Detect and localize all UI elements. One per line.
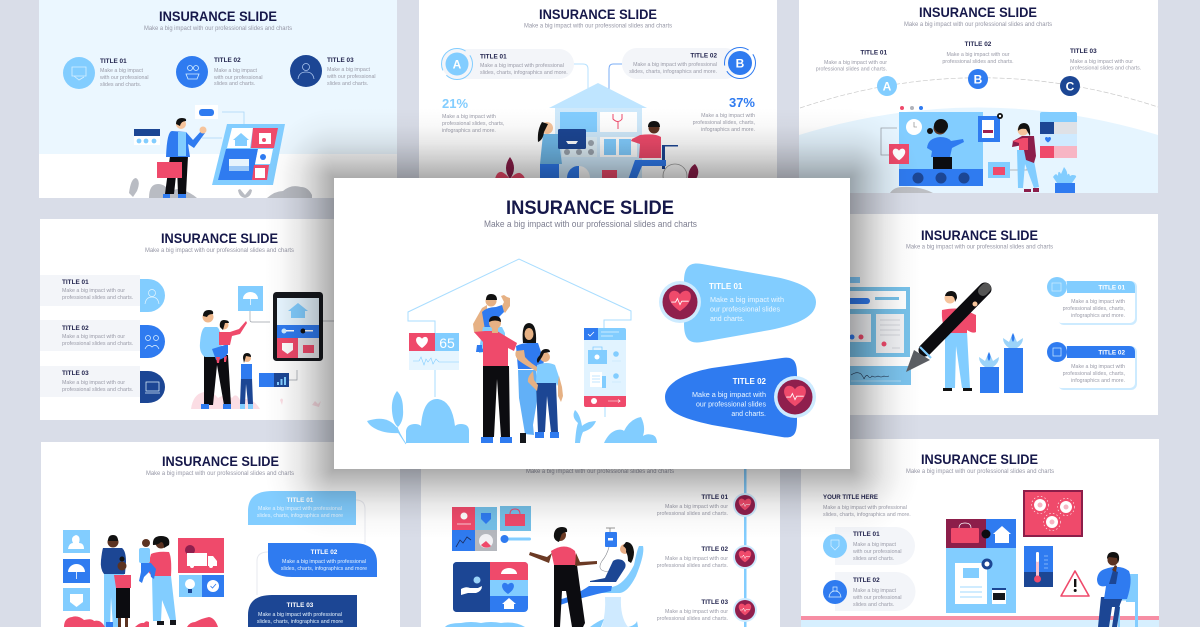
stat 21% [442,96,504,134]
slide 2 subtitle: Make a big impact with our professional slides and charts [524,22,672,30]
pill B: TITLE 02 [690,52,717,60]
card 01 [1047,277,1137,325]
stat 37%: infographics and more. [701,127,755,133]
point C: professional slides and charts. [1070,66,1141,72]
stat 37%: 37% [729,95,755,110]
IV drip [600,528,617,572]
pill 01: slides and charts. [853,556,894,562]
flow connector lines [257,500,365,595]
house outline [408,259,631,417]
centre subtitle: Make a big impact with our professional slides and charts [484,219,697,229]
stat 21%: professional slides, charts, [442,121,504,127]
dental chair with patient [554,542,643,627]
pill 01: with our professional [853,549,902,555]
pill B [622,48,756,79]
card 01: TITLE 01 [287,497,314,504]
card 02: professional slides, charts, [1063,371,1125,377]
grey foliage [890,187,933,193]
pill B: slides, charts, infographics and more. [629,69,717,75]
umbrella tile [238,286,270,322]
tablet dashboard [212,124,285,185]
giant pen [906,288,986,372]
card 02: TITLE 02 [1098,350,1125,356]
bag tile [988,162,1027,178]
potted plant [1053,167,1076,193]
item 01: with our professional [100,75,149,81]
doctor [529,527,597,627]
blue foliage [445,619,638,627]
item 03: TITLE 03 [327,57,354,64]
burgundy plants [495,157,698,179]
callout 02: TITLE 02 [733,377,767,386]
left plants [367,391,657,444]
virus tile [1023,490,1083,537]
intro text: YOUR TITLE HERE [823,494,879,501]
callout 02: Make a big impact with [692,392,766,399]
money tile [195,105,218,119]
slide 5: pen signature with two cards [840,214,1158,415]
slide 4: three side tabs with family [40,219,340,420]
nurse with tablet [538,122,586,180]
point C: C [1066,80,1075,94]
item 03: slides and charts. [327,81,368,87]
point C [1060,48,1141,96]
mother [515,323,544,443]
card 01: slides, charts, infographics and more [257,513,343,519]
slide 2 heading: INSURANCE SLIDE [539,6,657,22]
bar with leaf 2 [1003,333,1023,393]
card 02: Make a big impact with [1071,364,1125,370]
soft shadow of centre slide [264,108,920,539]
timeline item 03: TITLE 03 [701,599,728,606]
timeline item 02: TITLE 02 [701,546,728,553]
point A: professional slides and charts. [816,66,887,72]
item 01: Make a big impact [100,68,144,74]
point C: Make a big impact with our [1070,59,1133,65]
callout 01: Make a big impact with [710,297,784,304]
card 01: TITLE 01 [1098,284,1125,292]
light blue floor [801,620,1159,627]
slide 1 subtitle: Make a big impact with our professional slides and charts [144,25,292,32]
card 01: Make a big impact with [1071,299,1125,305]
slide 1: three title icons with businessman [39,0,397,198]
item 02 [176,56,263,88]
slide 8 subtitle: Make a big impact with our professional slides and charts [906,468,1054,475]
pink floor band [801,616,1159,620]
item 01 [63,57,149,89]
timeline item 01 [657,493,757,517]
tab 03 [40,366,165,403]
timeline item 02: Make a big impact with our [665,556,728,562]
pill 02: TITLE 02 [853,577,880,584]
contract document [840,277,910,357]
insurance tile board [946,519,1016,613]
woman presenter [1012,123,1039,192]
tab 02: TITLE 02 [62,325,89,332]
timeline item 03 [657,598,757,622]
pill A [442,48,574,80]
callout 01: TITLE 01 [709,282,743,291]
pill A: Make a big impact with professional [480,63,564,69]
point B: B [974,72,983,86]
son [528,349,563,438]
app panel [1040,112,1077,158]
point A: Make a big impact with our [824,60,887,66]
item 02: TITLE 02 [214,57,241,64]
stat 21%: infographics and more. [442,128,496,134]
card 02: infographics and more. [1071,378,1125,384]
father carrying daughter [200,310,247,409]
pill A: A [453,58,462,72]
bar with leaf 1 [979,352,999,393]
pill 01 [823,527,915,565]
pill 01: Make a big impact [853,542,897,548]
stat 21%: 21% [442,96,468,111]
child on shoulders [473,294,510,353]
heart tile and bracket [881,128,909,164]
slide 4 heading: INSURANCE SLIDE [161,230,278,246]
small chart tile [259,370,297,387]
tab 03: TITLE 03 [62,370,89,377]
tab 02 [40,320,165,358]
pill 01: TITLE 01 [853,531,880,538]
timeline item 02: professional slides and charts. [657,563,728,569]
thermometer tile [1024,546,1053,587]
tab 01: professional slides and charts. [62,295,133,301]
tab 02: professional slides and charts. [62,341,133,347]
video call window [899,112,983,186]
slide 3 heading: INSURANCE SLIDE [919,4,1037,20]
point B [942,41,1014,89]
man in wheelchair [628,121,687,188]
item 01: slides and charts. [100,82,141,88]
card 03 [248,595,357,627]
father with child on shoulders [473,294,517,443]
slide 3 subtitle: Make a big impact with our professional slides and charts [904,21,1052,28]
bulb and check tiles [179,575,224,597]
card 03: TITLE 03 [287,602,314,609]
care panel [453,562,528,612]
slide 4 subtitle: Make a big impact with our professional slides and charts [145,247,294,254]
pill B: B [736,56,745,70]
pill 02: Make a big impact [853,588,897,594]
card 02: Make a big impact with professional [282,559,366,565]
intro text: Make a big impact with professional [823,505,907,511]
point A [816,50,897,96]
businessman with case [157,118,206,198]
stat 37% [693,95,755,133]
light blue hill [799,108,1158,193]
timeline item 01: Make a big impact with our [665,504,728,510]
small girl [240,353,253,409]
connector lines [574,64,588,89]
tab 03: professional slides and charts. [62,387,133,393]
icon tiles left [63,530,90,611]
card 02: slides, charts, infographics and more [281,566,367,572]
tab 01 [40,275,165,312]
item 02: with our professional [214,75,263,81]
item 03: with our professional [327,74,376,80]
item 02: Make a big impact [214,68,258,74]
pill A: slides, charts, infographics and more. [480,70,568,76]
phone app [584,328,626,407]
signature strip [840,366,911,385]
pill 02: with our professional [853,595,902,601]
timeline item 02 [657,545,757,569]
slide 5 heading: INSURANCE SLIDE [921,227,1038,243]
vertical timeline [744,462,746,627]
card 01: professional slides, charts, [1063,306,1125,312]
callout 01: our professional slides [710,306,780,314]
point A: TITLE 01 [860,50,887,56]
warning triangle [1061,571,1089,596]
tab 01: Make a big impact with our [62,288,125,294]
slide 8 heading: INSURANCE SLIDE [921,451,1038,467]
item 01: TITLE 01 [100,58,127,65]
callout 01: and charts. [710,316,745,323]
point A: A [883,80,892,94]
person holding giant pen [906,288,986,391]
slide 1 heading: INSURANCE SLIDE [159,8,277,24]
rating card [134,129,160,145]
connector lines [202,112,244,138]
truck tile [178,538,224,573]
callout 02 [665,358,816,437]
grey ground foliage [129,178,312,198]
card 03: Make a big impact with professional [258,612,342,618]
card 01 [248,491,356,525]
card 02 [268,543,377,577]
house [549,83,647,190]
point C: TITLE 03 [1070,48,1097,55]
bag tile [500,506,531,531]
point B: Make a big impact with our [946,52,1010,58]
stat 37%: Make a big impact with [701,113,755,119]
stat 37%: professional slides, charts, [693,120,755,126]
icon grid tiles [452,507,497,551]
slider [500,535,531,543]
slide 5 subtitle: Make a big impact with our professional slides and charts [906,244,1053,250]
callout 02: our professional slides [696,402,766,408]
pill A: TITLE 01 [480,54,507,60]
callout 02: and charts. [731,411,766,418]
window dots [900,106,923,110]
timeline item 01: professional slides and charts. [657,511,728,517]
item 03: Make a big impact [327,67,371,73]
heart rate monitor [409,333,459,370]
red foliage [64,616,218,627]
timeline item 03: professional slides and charts. [657,616,728,622]
slide 7: timeline with dental chair [421,458,780,627]
centre heading: INSURANCE SLIDE [506,198,674,219]
item 02: slides and charts. [214,81,255,87]
slide 6: family with three stacked cards [41,442,400,627]
slide 3: A B C arc with video call [799,0,1158,193]
pill 02 [823,572,916,611]
dashed arc [800,78,1158,108]
slide 7 subtitle: Make a big impact with our professional slides and charts [526,468,674,475]
stat 21%: Make a big impact with [442,114,496,120]
slide 6 heading: INSURANCE SLIDE [162,453,279,469]
callout 01 [659,264,816,342]
intro text [823,494,911,518]
timeline item 01: TITLE 01 [701,494,728,501]
phone dashboard [273,292,323,361]
card 01: Make a big impact with professional [258,506,342,512]
card 02: TITLE 02 [311,549,338,556]
centre slide: family insurance [334,178,850,469]
card 01: infographics and more. [1071,313,1125,319]
slide 2: A/B pills with house [419,0,777,190]
tab 01: TITLE 01 [62,279,89,286]
pill 02: slides and charts. [853,602,894,608]
point B: TITLE 02 [965,41,992,48]
connector line [323,320,334,322]
tab 03: Make a big impact with our [62,380,125,386]
pill B: Make a big impact with professional [633,62,717,68]
item 03 [290,55,376,87]
card 03: slides, charts, infographics and more [257,619,343,625]
slide 6 subtitle: Make a big impact with our professional slides and charts [146,470,294,477]
father, mother and children [101,535,176,627]
document tile [978,113,1003,142]
pink hills [191,392,321,409]
card 02 [1047,342,1137,390]
heart rate monitor: 65 [439,335,455,351]
slide 8: title list with virus and thermometer [801,439,1159,627]
tab 02: Make a big impact with our [62,334,125,340]
point B: professional slides and charts. [942,59,1014,65]
worried man on chair [1097,552,1138,627]
timeline item 03: Make a big impact with our [665,609,728,615]
intro text: slides, charts, infographics and more. [823,512,911,518]
